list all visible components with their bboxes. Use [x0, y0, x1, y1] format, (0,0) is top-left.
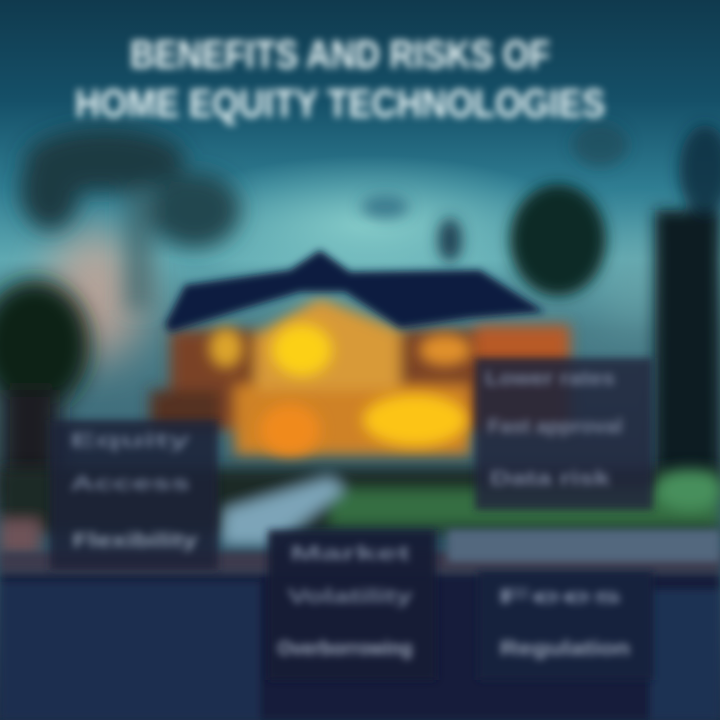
panel: left	[50, 420, 218, 570]
trees: right silhouette	[361, 123, 720, 500]
title: HOME EQUITY TECHNOLOGIES	[75, 82, 605, 126]
panel: bottom centre: Overborrowing	[278, 638, 412, 660]
panel: bottom centre	[268, 530, 436, 680]
trees: left silhouette	[0, 128, 240, 510]
panel: left: Equity	[70, 430, 192, 452]
title	[75, 33, 605, 126]
panel: right: Fast approval	[488, 416, 622, 438]
ground	[0, 468, 720, 555]
panel: bottom centre: Market	[290, 543, 411, 565]
panel: right: Data risk	[490, 468, 611, 490]
foreground band	[0, 552, 720, 720]
panel: right: Lower rates	[485, 368, 615, 390]
panel: bottom centre: Volatility	[288, 586, 414, 608]
panel: bottom right: Regulation	[500, 638, 630, 660]
title: BENEFITS AND RISKS OF	[130, 33, 550, 77]
panel: right	[475, 358, 653, 510]
panel: bottom right	[448, 530, 720, 680]
house	[150, 250, 570, 456]
panel: left: Flexibility	[72, 530, 199, 552]
house body	[150, 298, 570, 455]
house windows	[209, 324, 471, 456]
panel: bottom right: Fees	[498, 586, 622, 608]
panel: left: Access	[70, 473, 190, 495]
house roof	[165, 250, 545, 332]
